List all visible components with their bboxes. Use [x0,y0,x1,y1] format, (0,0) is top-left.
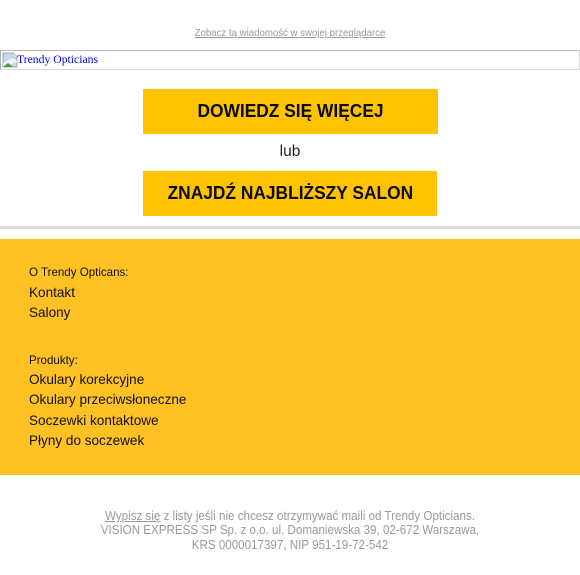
button: learn more: DOWIEDZ SIĘ WIĘCEJ [197,101,384,121]
footer legal text [100,509,479,552]
icon: broken image [2,52,18,68]
link: sunglasses: Okulary przeciwsłoneczne [29,391,186,407]
broken logo image: Trendy Opticians [17,53,98,66]
link: corrective glasses: Okulary korekcyjne [29,371,144,387]
button: learn more [143,89,438,134]
company address line: VISION EXPRESS SP Sp. z o.o. ul. Domaniewska 39, 02-672 Warszawa, [101,523,479,537]
broken logo image [0,50,580,70]
browser view link: Zobacz tą wiadomość w swojej przeglądarce [195,28,385,39]
button: find nearest salon: ZNAJDŹ NAJBLIŻSZY SALON [167,183,413,203]
link: contact lenses: Soczewki kontaktowe [29,412,159,428]
text: or: lub [280,143,300,160]
panel: footer links [0,239,580,475]
link: contact: Kontakt [29,284,75,300]
button: find nearest salon [143,171,437,216]
unsubscribe line: Wypisz się z listy jeśli nie chcesz otrzymywać maili od Trendy Opticians. [105,509,475,523]
heading: about: O Trendy Opticans: [29,265,129,279]
heading: products: Produkty: [29,353,78,367]
registration line: KRS 0000017397, NIP 951-19-72-542 [192,538,388,552]
link: salons: Salony [29,304,70,320]
link: lens fluids: Płyny do soczewek [29,432,144,448]
